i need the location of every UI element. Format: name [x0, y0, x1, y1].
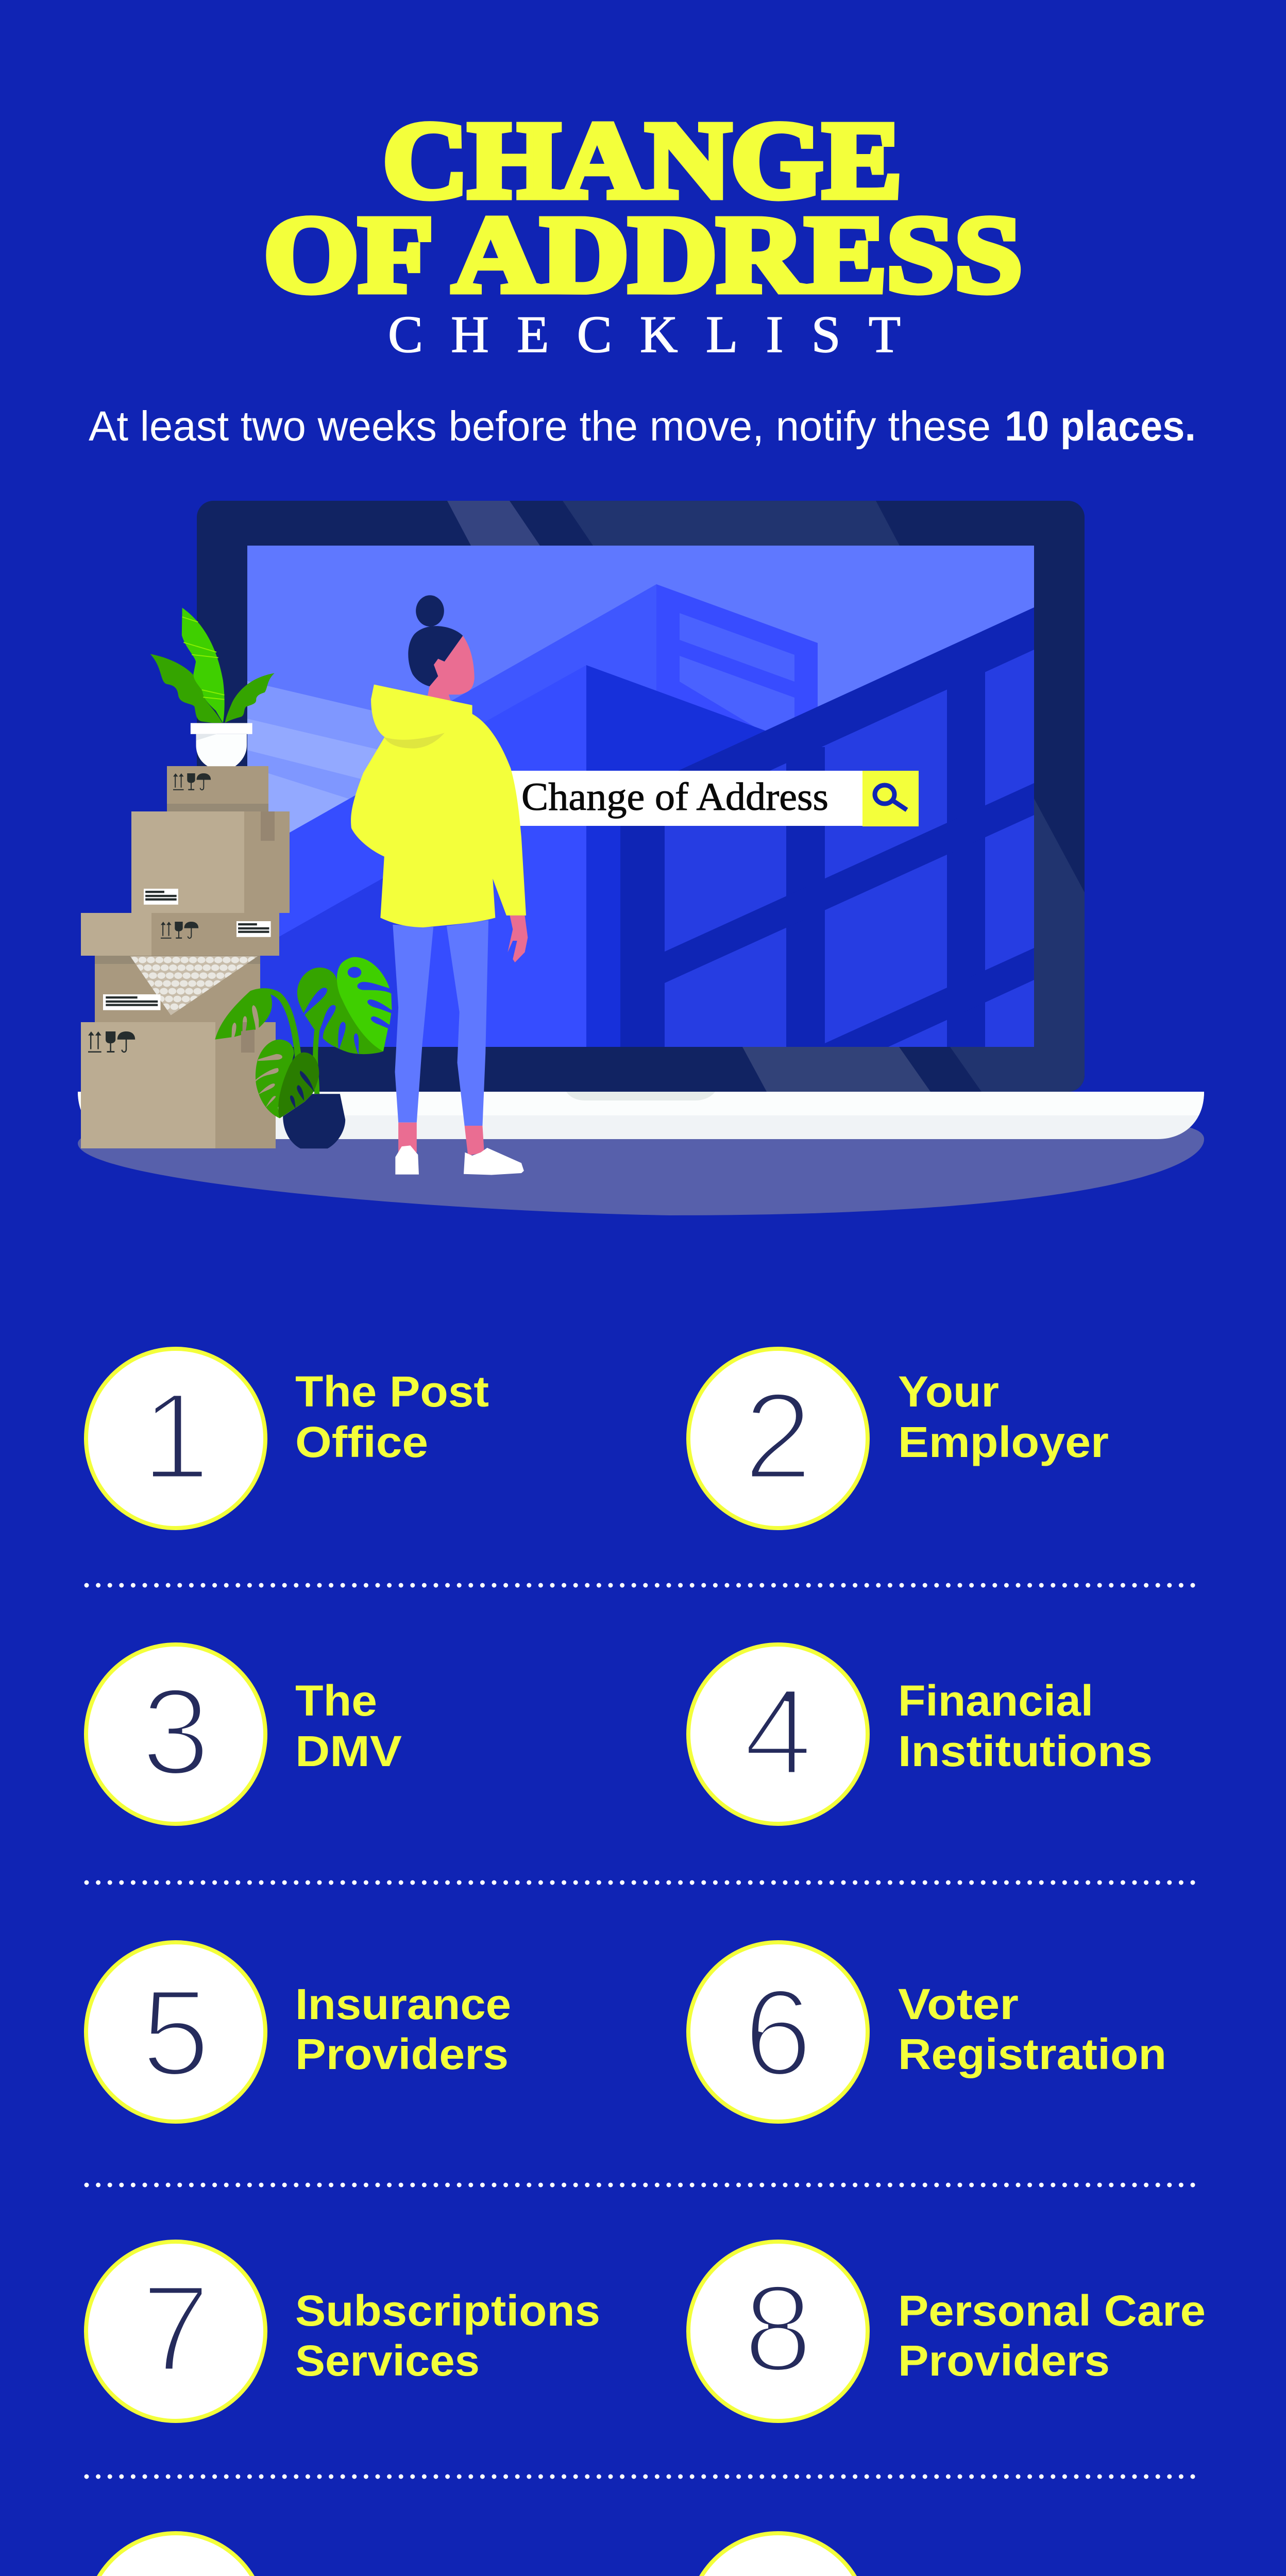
item 5: Insurance	[295, 1980, 511, 2028]
item 1: 1	[141, 1367, 210, 1505]
item 6: 6	[743, 1963, 813, 2102]
item 10	[688, 2533, 1092, 2576]
navy pot	[283, 1094, 345, 1148]
item 3	[86, 1645, 402, 1824]
item 5	[86, 1942, 511, 2122]
hero illustration	[78, 501, 1204, 1215]
item 7: Services	[295, 2336, 480, 2385]
title: OF ADDRESS	[264, 194, 1022, 315]
search button	[862, 771, 919, 826]
item 4: 4	[743, 1663, 813, 1801]
neck and face	[428, 636, 475, 702]
hand	[507, 916, 528, 962]
intro sentence: At least two weeks before the move, notify these	[89, 403, 991, 450]
item 8: 8	[743, 2259, 813, 2397]
bright leaf	[337, 957, 392, 1052]
lower leaf	[256, 1040, 294, 1118]
item 3: The	[295, 1676, 377, 1725]
item 5: Providers	[295, 2030, 509, 2078]
item 1: The Post	[295, 1367, 489, 1416]
light beams	[247, 681, 384, 833]
item 6: Voter	[898, 1980, 1019, 2028]
search bar	[510, 771, 919, 826]
stacked boxes	[81, 766, 290, 1148]
hair	[408, 595, 463, 686]
item 7	[86, 2242, 600, 2421]
item 4: Institutions	[898, 1727, 1153, 1775]
back leaf	[297, 968, 383, 1054]
item 6	[688, 1942, 1166, 2122]
person	[351, 595, 528, 1175]
plant on boxes	[150, 608, 275, 766]
item 7: Subscriptions	[295, 2286, 600, 2335]
laptop lid	[197, 501, 1085, 1092]
white pot	[191, 723, 252, 766]
shoes	[395, 1145, 524, 1175]
center leaf	[182, 608, 225, 723]
back building	[451, 584, 818, 731]
dark leaf	[278, 1053, 319, 1118]
item 3: DMV	[295, 1727, 402, 1775]
item 2	[688, 1349, 1109, 1528]
title	[264, 99, 1022, 315]
search text: Change of Address	[521, 775, 828, 819]
item 1: Office	[295, 1418, 428, 1466]
glass panels and beams	[620, 607, 1034, 1047]
stems	[270, 991, 317, 1094]
checklist	[86, 1349, 1206, 2576]
laptop shadow	[78, 1127, 1204, 1215]
item 4: Financial	[898, 1676, 1093, 1725]
socks	[398, 1123, 484, 1156]
title: CHANGE	[383, 99, 902, 221]
box three flat	[81, 913, 279, 956]
item 3: 3	[141, 1663, 210, 1801]
item 5: 5	[141, 1963, 210, 2102]
item 2: Your	[898, 1367, 999, 1416]
box one	[167, 766, 268, 811]
monstera plant	[215, 957, 392, 1148]
item 2: Employer	[898, 1418, 1109, 1466]
box four open	[95, 956, 260, 1022]
item 6: Registration	[898, 2030, 1166, 2078]
box two	[131, 811, 290, 913]
webcam	[635, 515, 647, 528]
right leaf	[225, 673, 275, 723]
item 8: Providers	[898, 2336, 1110, 2385]
item 8	[688, 2242, 1206, 2421]
yellow hoodie	[351, 685, 526, 927]
item 2: 2	[743, 1367, 813, 1505]
item 1	[86, 1349, 489, 1528]
item 4	[688, 1645, 1153, 1824]
subtitle: checklist: CHECKLIST	[388, 306, 901, 364]
item 9	[86, 2533, 627, 2576]
item 8: Personal Care	[898, 2286, 1206, 2335]
tape on box	[241, 1029, 255, 1052]
front building	[260, 665, 766, 1047]
legs	[393, 920, 488, 1126]
laptop screen	[247, 546, 1034, 1047]
left leaf	[150, 654, 223, 723]
laptop base	[78, 1092, 1204, 1139]
box five	[81, 1022, 276, 1148]
drooping leaf	[215, 988, 301, 1055]
intro sentence: 10 places.	[1005, 403, 1196, 450]
item 7: 7	[141, 2259, 210, 2397]
